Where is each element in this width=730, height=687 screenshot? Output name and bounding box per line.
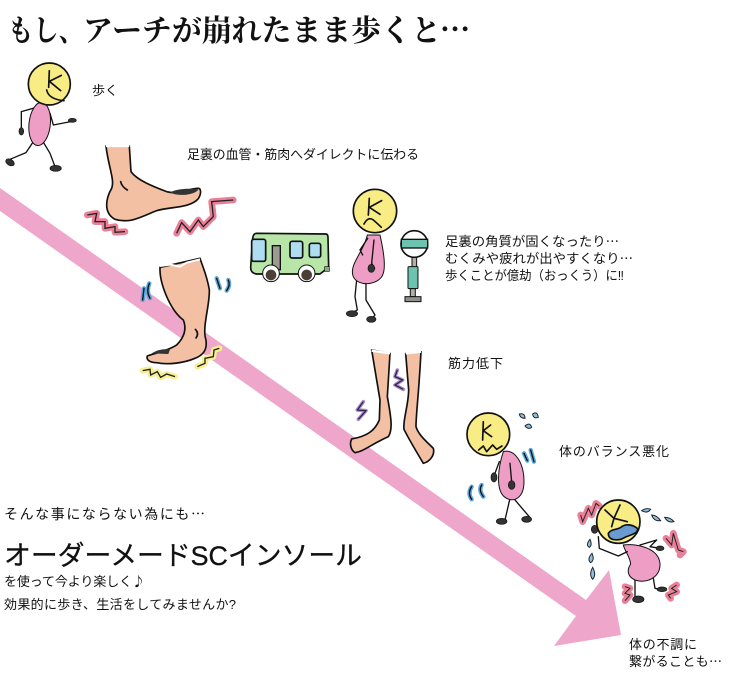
icon: unbalanced figure [467,413,538,524]
title: アーチが崩れたまま歩くと [83,15,441,48]
title: もし、 [8,15,84,48]
text: lead-in: そんな事にならない為にも… [4,504,205,524]
text: sole problems: 歩くことが億劫（おっくう）に‼ [445,268,624,283]
icon: foot with trembling marks [143,258,229,377]
text: call to action: を使って今より楽しく♪ [4,571,145,590]
text: call to action: 効果的に歩き、生活をしてみませんか? [4,597,236,612]
text: sole problems: むくみや疲れが出やすくなり … [445,248,633,267]
icon: bus stop sign [401,231,428,302]
text: call to action [4,571,236,612]
text: conclusion [629,637,722,670]
title: … [440,5,470,38]
text: muscle decline: 筋力低下 [448,356,503,371]
icon: walking figure [4,63,76,171]
text: sole problems: 足裏の角質が固くなったり … [445,231,619,250]
icon: tired figure at bus stop [346,189,397,322]
text: conclusion: 繋がることも… [629,651,722,670]
arrow: worsening diagonal [0,188,621,646]
text: walk: 歩く [92,83,118,98]
text: worsening balance: 体のバランス悪化 [559,444,669,459]
icon: legs with weakness marks [351,350,434,463]
text: sole problems [445,231,633,283]
text: conclusion: 体の不調に [629,637,697,652]
title [8,5,470,48]
icon: foot with red impact marks [87,146,233,233]
text: direct impact: 足裏の血管・筋肉へダイレクトに伝わる [187,147,419,162]
icon: bus [251,233,329,282]
icon: figure collapsing in pain [581,500,683,603]
heading: custom insole: オーダーメードSCインソール [4,541,362,571]
